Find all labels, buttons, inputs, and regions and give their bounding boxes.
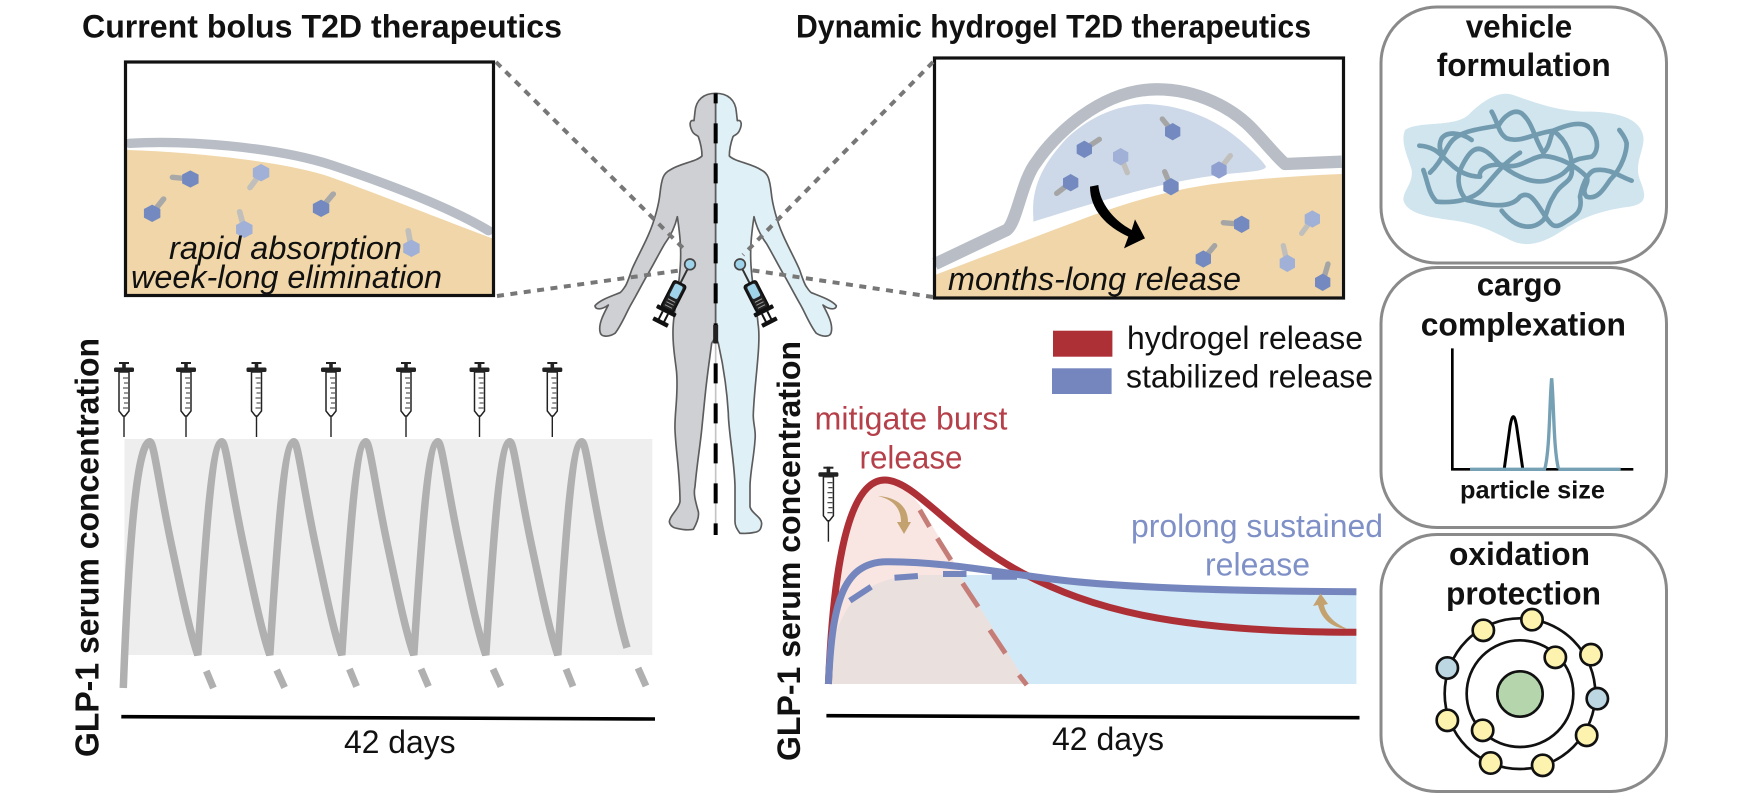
panel: bolus skin cross-section bbox=[126, 62, 494, 296]
panel: cargo complexation bbox=[1381, 266, 1666, 528]
title: dynamic hydrogel therapeutics: Dynamic hydrogel T2D therapeutics bbox=[796, 8, 1311, 44]
line: hydrogel release curve bbox=[828, 480, 1356, 684]
zoom connector lines bbox=[496, 62, 933, 297]
annotation: mitigate burst release: mitigate burst bbox=[815, 400, 1008, 436]
panel: cargo complexation: particle size bbox=[1460, 476, 1605, 504]
legend: hydrogel release bbox=[1127, 320, 1363, 356]
panel: cargo complexation: complexation bbox=[1421, 306, 1626, 342]
arrow: release into tissue bbox=[1090, 185, 1145, 248]
panel: cargo complexation: cargo bbox=[1477, 266, 1562, 302]
panel: vehicle formulation bbox=[1381, 7, 1666, 263]
panel: oxidation protection bbox=[1381, 534, 1666, 792]
icon: atom with electrons bbox=[1437, 609, 1608, 776]
panel: oxidation protection: oxidation bbox=[1449, 536, 1590, 572]
chart: hydrogel vs stabilized release bbox=[818, 467, 1360, 757]
panel: oxidation protection: protection bbox=[1446, 576, 1601, 612]
legend bbox=[1052, 320, 1373, 394]
annotation: prolong sustained release: prolong sustained bbox=[1131, 508, 1383, 544]
annotation: mitigate burst release: release bbox=[860, 440, 962, 476]
annotation: prolong sustained release: release bbox=[1205, 546, 1310, 582]
line: dashed stabilized portion bbox=[850, 574, 1017, 601]
icon: syringe bbox=[818, 467, 838, 542]
label: week-long elimination: week-long elimination bbox=[131, 259, 442, 295]
human figure with injections bbox=[595, 93, 836, 535]
arrow: raise sustained level bbox=[1313, 594, 1348, 629]
panel: hydrogel skin cross-section bbox=[934, 58, 1344, 298]
panel: vehicle formulation: formulation bbox=[1437, 47, 1611, 83]
panel: vehicle formulation: vehicle bbox=[1466, 8, 1572, 44]
line: dashed burst decay bbox=[920, 510, 1027, 685]
y-axis label: right chart: GLP-1 serum concentration bbox=[771, 341, 807, 761]
icons: weekly injection syringes bbox=[114, 362, 562, 437]
y-axis label: left chart: GLP-1 serum concentration bbox=[68, 338, 106, 757]
icon: polymer network bbox=[1403, 94, 1644, 244]
annotation: mitigate burst release bbox=[815, 400, 1008, 476]
label: rapid absorption: rapid absorption bbox=[169, 230, 402, 266]
annotation: prolong sustained release bbox=[1131, 508, 1383, 582]
x-axis label: 42 days bbox=[1052, 721, 1164, 757]
x-axis label: 42 days bbox=[344, 724, 456, 760]
title: current bolus therapeutics: Current bolus T2D therapeutics bbox=[82, 8, 562, 44]
chart: bolus concentration over 42 days bbox=[114, 362, 655, 760]
legend: stabilized release bbox=[1126, 358, 1373, 394]
label: months-long release: months-long release bbox=[948, 261, 1241, 297]
line: stabilized release curve bbox=[828, 562, 1356, 684]
chart: particle size distribution bbox=[1452, 348, 1633, 469]
arrow: reduce burst bbox=[878, 496, 911, 534]
line: repeated bolus peaks bbox=[123, 442, 627, 688]
